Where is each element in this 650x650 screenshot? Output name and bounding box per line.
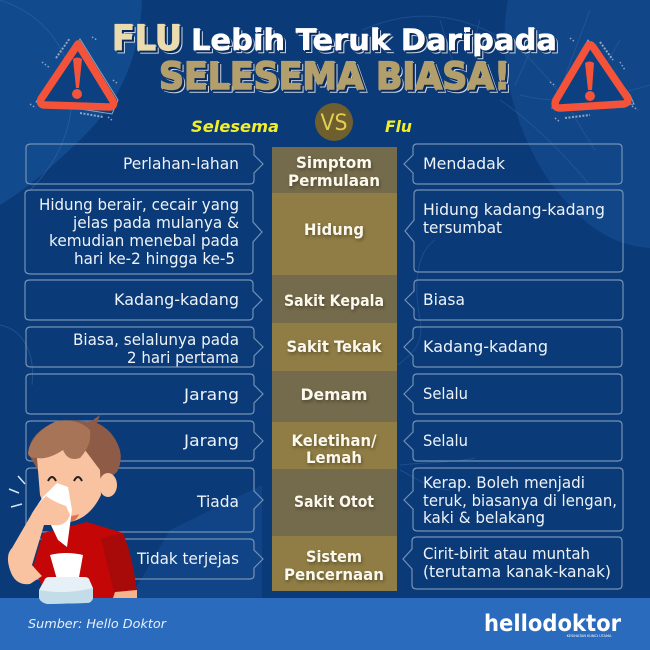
hair front bbox=[28, 420, 90, 459]
footer bar bbox=[0, 598, 650, 650]
panel: Selesema callouts: Tidak terjejas bbox=[136, 549, 239, 568]
panel: Selesema callouts: Biasa, selalunya pada bbox=[73, 330, 239, 349]
panel: Selesema callouts: jelas pada mulanya & bbox=[72, 213, 239, 232]
logo: hellodoktor: hellodoktor bbox=[484, 611, 622, 637]
panel: symptom column: Permulaan bbox=[288, 171, 380, 190]
panel: Selesema callouts: hari ke-2 hingga ke-5 bbox=[74, 249, 235, 268]
panel: Selesema callouts: Hidung berair, cecair yang bbox=[39, 195, 239, 214]
title bbox=[112, 19, 557, 98]
panel: symptom column: Pencernaan bbox=[284, 565, 384, 584]
panel: Flu callouts: Selalu bbox=[423, 384, 468, 403]
panel: Flu callouts: Kerap. Boleh menjadi bbox=[423, 473, 585, 492]
panel: symptom column: Keletihan/ bbox=[292, 431, 377, 450]
panel: Flu callouts: (terutama kanak-kanak) bbox=[423, 562, 611, 581]
panel: Selesema callouts: 2 hari pertama bbox=[127, 348, 239, 367]
panel: Selesema callouts: Jarang bbox=[183, 431, 239, 450]
panel: symptom column: Lemah bbox=[306, 448, 362, 467]
panel: Flu callouts: teruk, biasanya di lengan, bbox=[423, 491, 617, 510]
panel: symptom column: Sakit Otot bbox=[294, 492, 374, 511]
title line 2: SELESEMA BIASA! bbox=[159, 55, 510, 98]
header: Flu: Flu bbox=[385, 117, 412, 136]
panel: Selesema callouts: Tiada bbox=[196, 492, 239, 511]
illustration: boy with tissue bbox=[8, 415, 137, 604]
tissue bbox=[30, 483, 72, 547]
panel: Flu callouts: Cirit-birit atau muntah bbox=[423, 544, 590, 563]
panel: Selesema callouts: kemudian menebal pada bbox=[49, 231, 239, 250]
badge: VS: VS bbox=[320, 111, 348, 136]
title line 1 bbox=[112, 19, 557, 59]
title line 1: Lebih Teruk Daripada bbox=[191, 23, 557, 57]
panel: Flu callouts bbox=[403, 144, 623, 589]
panel: symptom column: Simptom bbox=[296, 153, 372, 172]
arm bbox=[8, 496, 70, 584]
panel: Selesema callouts: Perlahan-lahan bbox=[123, 154, 239, 173]
panel: Selesema callouts: Kadang-kadang bbox=[114, 290, 239, 309]
logo: hellodoktor: KESIHATAN KUNCI UTAMA bbox=[567, 634, 612, 638]
panel: Flu callouts: Mendadak bbox=[423, 154, 506, 173]
panel: Flu callouts: tersumbat bbox=[423, 218, 502, 237]
icon: warning triangle right bbox=[550, 38, 638, 122]
panel: symptom column: Sakit Tekak bbox=[286, 337, 382, 356]
shirt bbox=[33, 522, 137, 598]
panel: symptom column bbox=[272, 147, 397, 591]
icon: warning triangle left bbox=[30, 37, 118, 121]
panel: symptom column: Sistem bbox=[306, 547, 362, 566]
sneeze lines bbox=[9, 476, 25, 507]
source note: Sumber: Hello Doktor bbox=[28, 616, 167, 631]
header: Selesema: Selesema bbox=[191, 117, 279, 136]
tissue box bbox=[39, 577, 93, 604]
eyes and mouth bbox=[48, 477, 82, 481]
panel: symptom column: Demam bbox=[300, 385, 368, 404]
panel: symptom column: Hidung bbox=[304, 220, 364, 239]
panel: Flu callouts: Biasa bbox=[423, 290, 465, 309]
panel: Flu callouts: kaki & belakang bbox=[423, 508, 545, 527]
badge: VS bbox=[315, 103, 353, 141]
title line 1: FLU bbox=[112, 19, 182, 59]
face bbox=[37, 450, 101, 522]
panel: Flu callouts: Hidung kadang-kadang bbox=[423, 200, 605, 219]
panel: Selesema callouts bbox=[25, 144, 263, 579]
ear bbox=[99, 473, 117, 497]
hair back bbox=[28, 415, 121, 486]
panel: Flu callouts: Selalu bbox=[423, 431, 468, 450]
tissue in box bbox=[50, 553, 83, 583]
panel: Flu callouts: Kadang-kadang bbox=[423, 337, 548, 356]
panel: Selesema callouts: Jarang bbox=[183, 385, 239, 404]
panel: symptom column: Sakit Kepala bbox=[284, 291, 384, 310]
